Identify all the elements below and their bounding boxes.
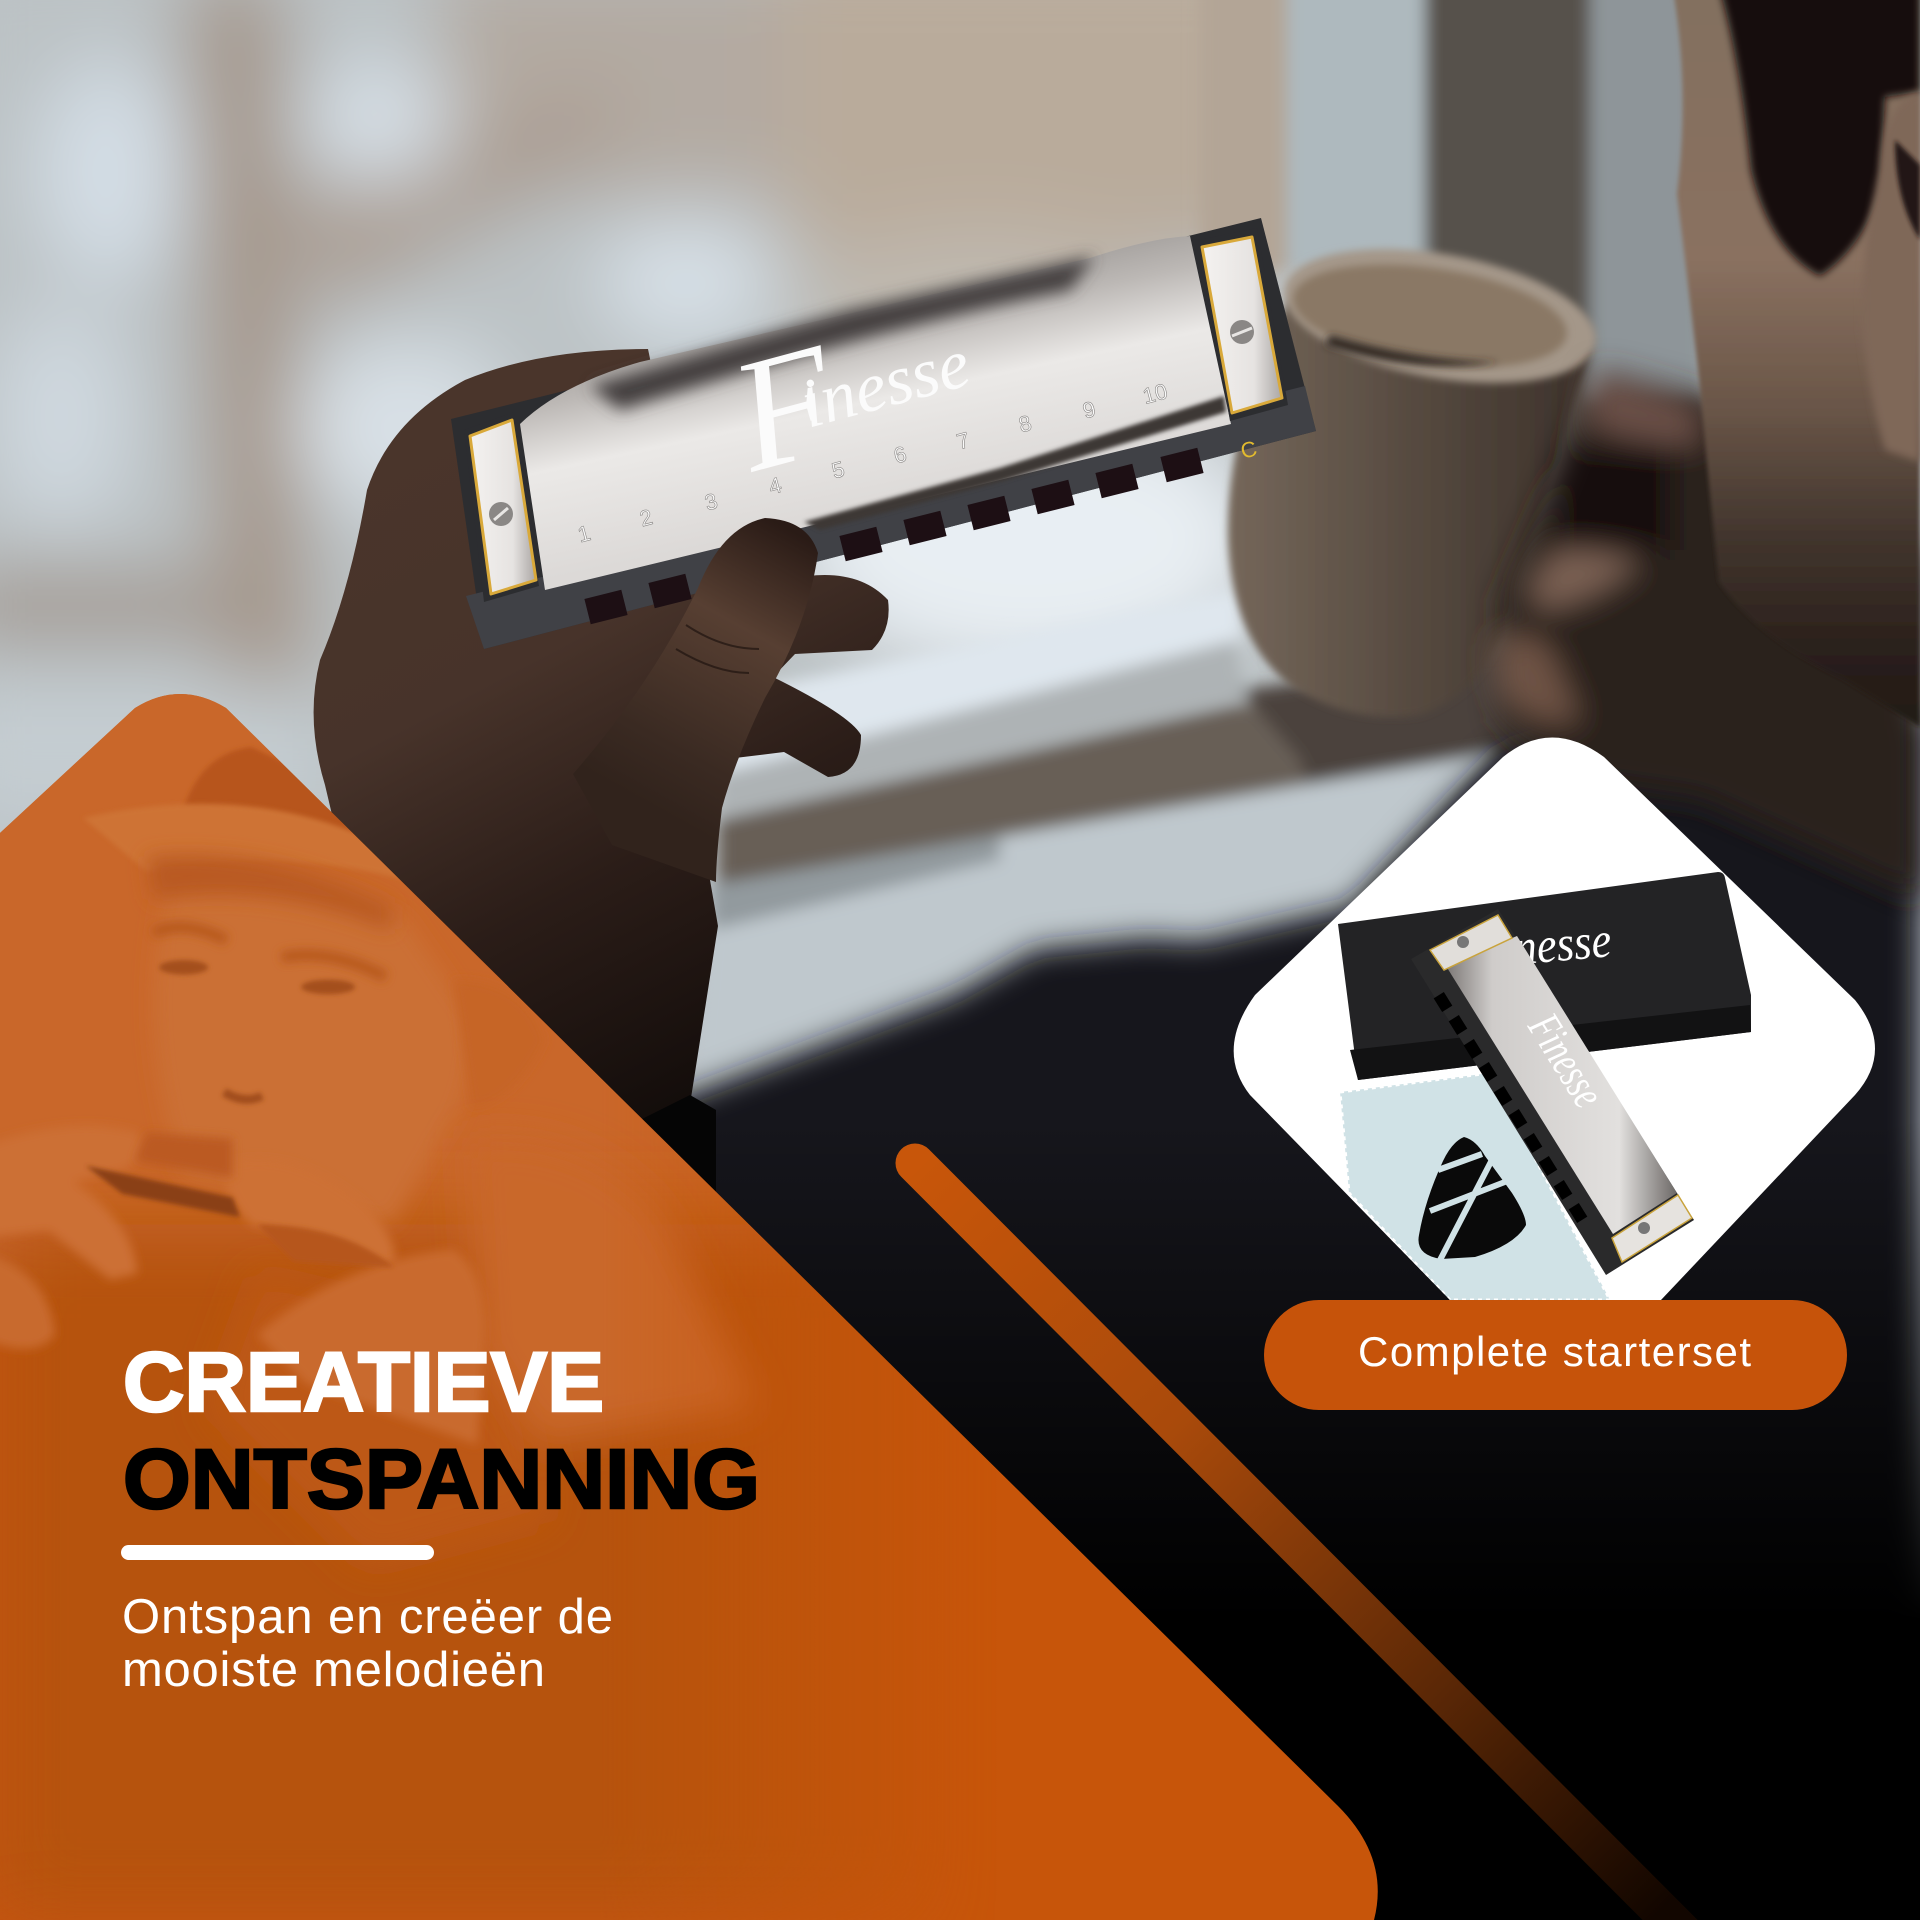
window sill bands <box>690 590 1520 1095</box>
heading: ontspanning: ONTSPANNING <box>123 1432 760 1526</box>
engraved brand name: inesse <box>792 325 978 443</box>
cup rim <box>1274 228 1606 404</box>
cup interior <box>1287 249 1573 383</box>
hole numbers: 8 <box>1016 410 1034 437</box>
logo pick <box>1418 1137 1526 1262</box>
small harmonica <box>1411 909 1694 1275</box>
right end tab <box>1198 228 1288 421</box>
subtitle: mooiste melodieën <box>122 1643 545 1697</box>
bottom darkening <box>600 1120 1920 1620</box>
cleaning cloth <box>1340 1073 1610 1300</box>
reed holes <box>584 448 1204 624</box>
plate shadow bottom <box>804 396 1226 530</box>
orange panel with duotone player photo <box>0 686 1378 1920</box>
shirt <box>466 1186 750 1452</box>
left end tab <box>464 412 539 602</box>
heading: creatieve: CREATIEVE <box>123 1335 604 1429</box>
hand around the cup and neck <box>1495 370 1920 900</box>
cup body <box>1228 300 1590 717</box>
diagonal orange stripe <box>915 1163 1700 1920</box>
cover plate <box>520 236 1231 590</box>
hole numbers: 10 <box>1140 379 1170 409</box>
hole numbers: 7 <box>954 427 972 454</box>
button: complete starterset <box>1264 1300 1847 1410</box>
subtitle: Ontspan en creëer de <box>122 1590 613 1644</box>
hands and harmonica <box>0 1126 143 1280</box>
thumb in front of the harmonica <box>573 518 818 882</box>
hole numbers: 9 <box>1080 396 1098 423</box>
hole numbers: 2 <box>637 504 655 531</box>
button: complete starterset: Complete starterset <box>1358 1328 1751 1375</box>
black box: Finesse <box>1471 911 1613 979</box>
hole numbers: 5 <box>829 456 847 483</box>
product diamond: complete starter set <box>1234 738 1875 1300</box>
key letter: C <box>1238 436 1260 464</box>
black box <box>1338 872 1751 1080</box>
face <box>160 902 462 1224</box>
window frame <box>1200 0 1705 780</box>
person head: cheek, hair, ear <box>1673 0 1920 727</box>
hat <box>88 747 396 876</box>
dark body of the person <box>660 680 1920 1920</box>
window view: blurred winter trees <box>0 0 1347 820</box>
main harmonica <box>451 218 1316 649</box>
duotone photo: harmonica player <box>0 686 967 1920</box>
harmonica body <box>451 218 1316 649</box>
coffee cup <box>1228 228 1606 717</box>
hole numbers: 6 <box>891 441 909 468</box>
hand cuff <box>640 1095 716 1200</box>
hole numbers: 1 <box>575 520 593 547</box>
small harmonica: Finesse <box>1518 1004 1615 1116</box>
hand holding the harmonica (fingers behind) <box>314 349 889 1200</box>
hole numbers <box>575 379 1170 547</box>
subtitle <box>122 1590 613 1697</box>
plate shadow top <box>590 256 1095 410</box>
hole numbers: 3 <box>702 488 720 515</box>
engraved brand name: F <box>714 308 858 506</box>
hole numbers: 4 <box>766 472 784 499</box>
underline <box>121 1545 434 1560</box>
